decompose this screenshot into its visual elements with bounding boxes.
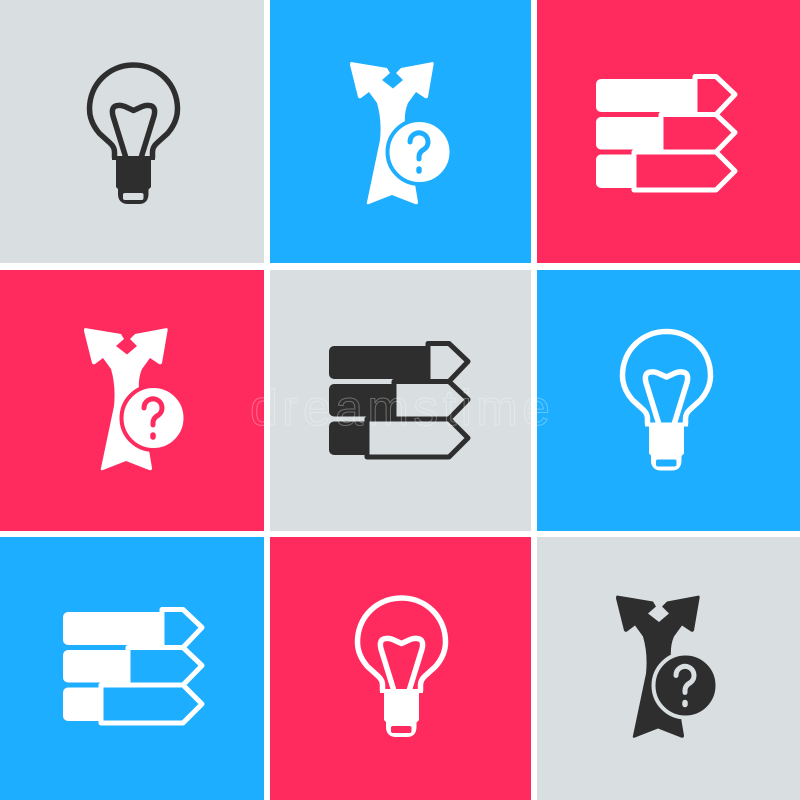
panel: grey arrows [270, 270, 531, 531]
icon: light bulb dark [90, 65, 178, 202]
panel: grey dress [537, 537, 800, 800]
panel: blue arrows [0, 537, 264, 800]
icon: arrow labels white [596, 76, 735, 190]
icon: arrow labels white on blue [63, 610, 202, 723]
icon: arrow labels dark [329, 344, 468, 457]
icon: light bulb white on red [358, 598, 446, 734]
watermark: dreamstime [250, 380, 550, 436]
panel: red dress [0, 270, 264, 531]
panel: red arrows [537, 0, 800, 263]
icon: dress with question mark dark [616, 596, 718, 738]
panel: blue bulb [537, 270, 800, 531]
panel: red bulb [270, 537, 531, 800]
icon: dress with question mark white on red [84, 328, 186, 470]
panel: grey bulb [0, 0, 264, 263]
panel: blue dress [270, 0, 531, 263]
icon: light bulb white on blue [622, 332, 710, 468]
icon: dress with question mark white [350, 62, 452, 204]
